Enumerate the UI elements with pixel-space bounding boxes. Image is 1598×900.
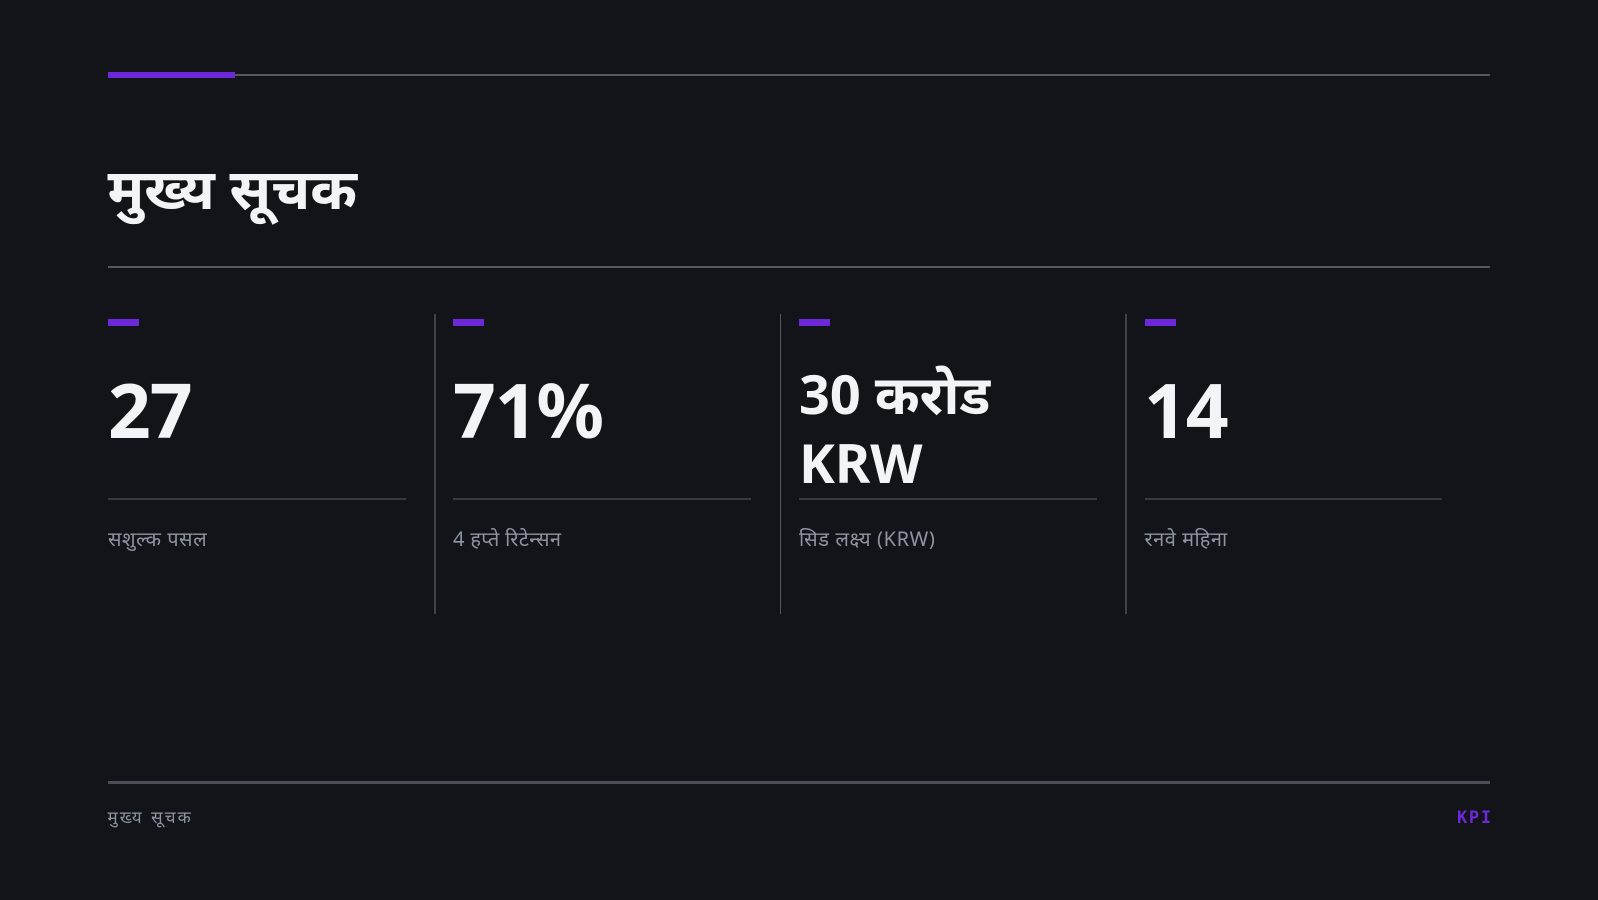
value: 14: 14 — [1144, 358, 1227, 460]
panel: KPI seed target — [799, 314, 1127, 614]
panel: KPI paid crops — [108, 314, 436, 614]
value: 27: 27 — [108, 358, 191, 460]
label: runway months: रनवे महिना — [1144, 525, 1228, 552]
value: 30 crore KRW: 30 करोड — [799, 356, 990, 430]
label: retention: 4 हप्ते रिटेन्सन — [453, 525, 561, 552]
top rule with accent — [108, 72, 1490, 78]
label: paid crops: सशुल्क पसल — [108, 525, 207, 552]
panel: KPI runway — [1144, 319, 1442, 552]
value: 30 crore KRW — [799, 356, 991, 499]
title: मुख्य सूचक — [108, 149, 357, 226]
footer tag: KPI — [1457, 808, 1493, 828]
value: 30 crore KRW: KRW — [799, 425, 922, 499]
label: seed target: सिड लक्ष्य (KRW) — [799, 525, 935, 552]
footer rule — [108, 781, 1490, 784]
footer title: मुख्य सूचक — [108, 808, 193, 828]
value: 71%: 71% — [453, 358, 603, 460]
panel: KPI retention — [453, 314, 781, 614]
title rule — [108, 266, 1490, 268]
